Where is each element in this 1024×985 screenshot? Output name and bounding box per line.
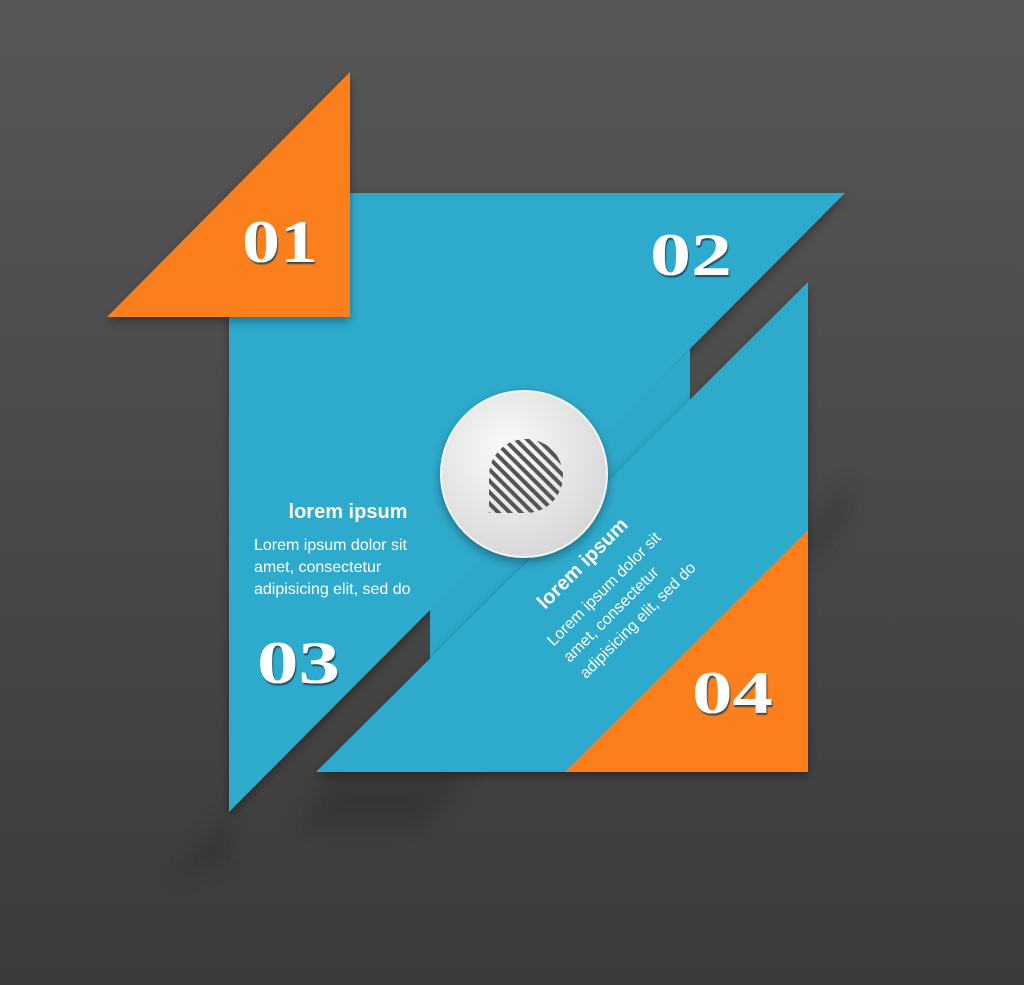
text block left: [254, 501, 411, 598]
text block left: amet, consectetur: [254, 559, 382, 576]
panel: middle blue band: [430, 349, 690, 660]
text block left: Lorem ipsum dolor sit: [254, 537, 408, 554]
number 02: 02: [650, 222, 732, 288]
text block rotated: [519, 501, 700, 682]
shadow strips: [170, 480, 850, 880]
text block left: lorem ipsum: [289, 501, 407, 523]
number 03: 03: [257, 630, 340, 696]
number 01: 01: [242, 209, 318, 275]
number 04: 04: [692, 660, 773, 726]
icon: striped speech drop: [489, 439, 563, 513]
text block rotated: lorem ipsum: [533, 514, 633, 614]
text block rotated: Lorem ipsum dolor sit: [544, 529, 665, 650]
icon circle: [441, 391, 607, 557]
panel: orange triangle 01: [107, 72, 350, 317]
panel: upper blue triangle: [229, 193, 845, 812]
text block left: adipisicing elit, sed do: [254, 581, 411, 598]
text block rotated: amet, consectetur: [561, 563, 663, 666]
panel: orange triangle 04: [565, 530, 808, 772]
text block rotated: adipisicing elit, sed do: [577, 559, 700, 682]
panel: lower blue triangle: [316, 282, 808, 772]
